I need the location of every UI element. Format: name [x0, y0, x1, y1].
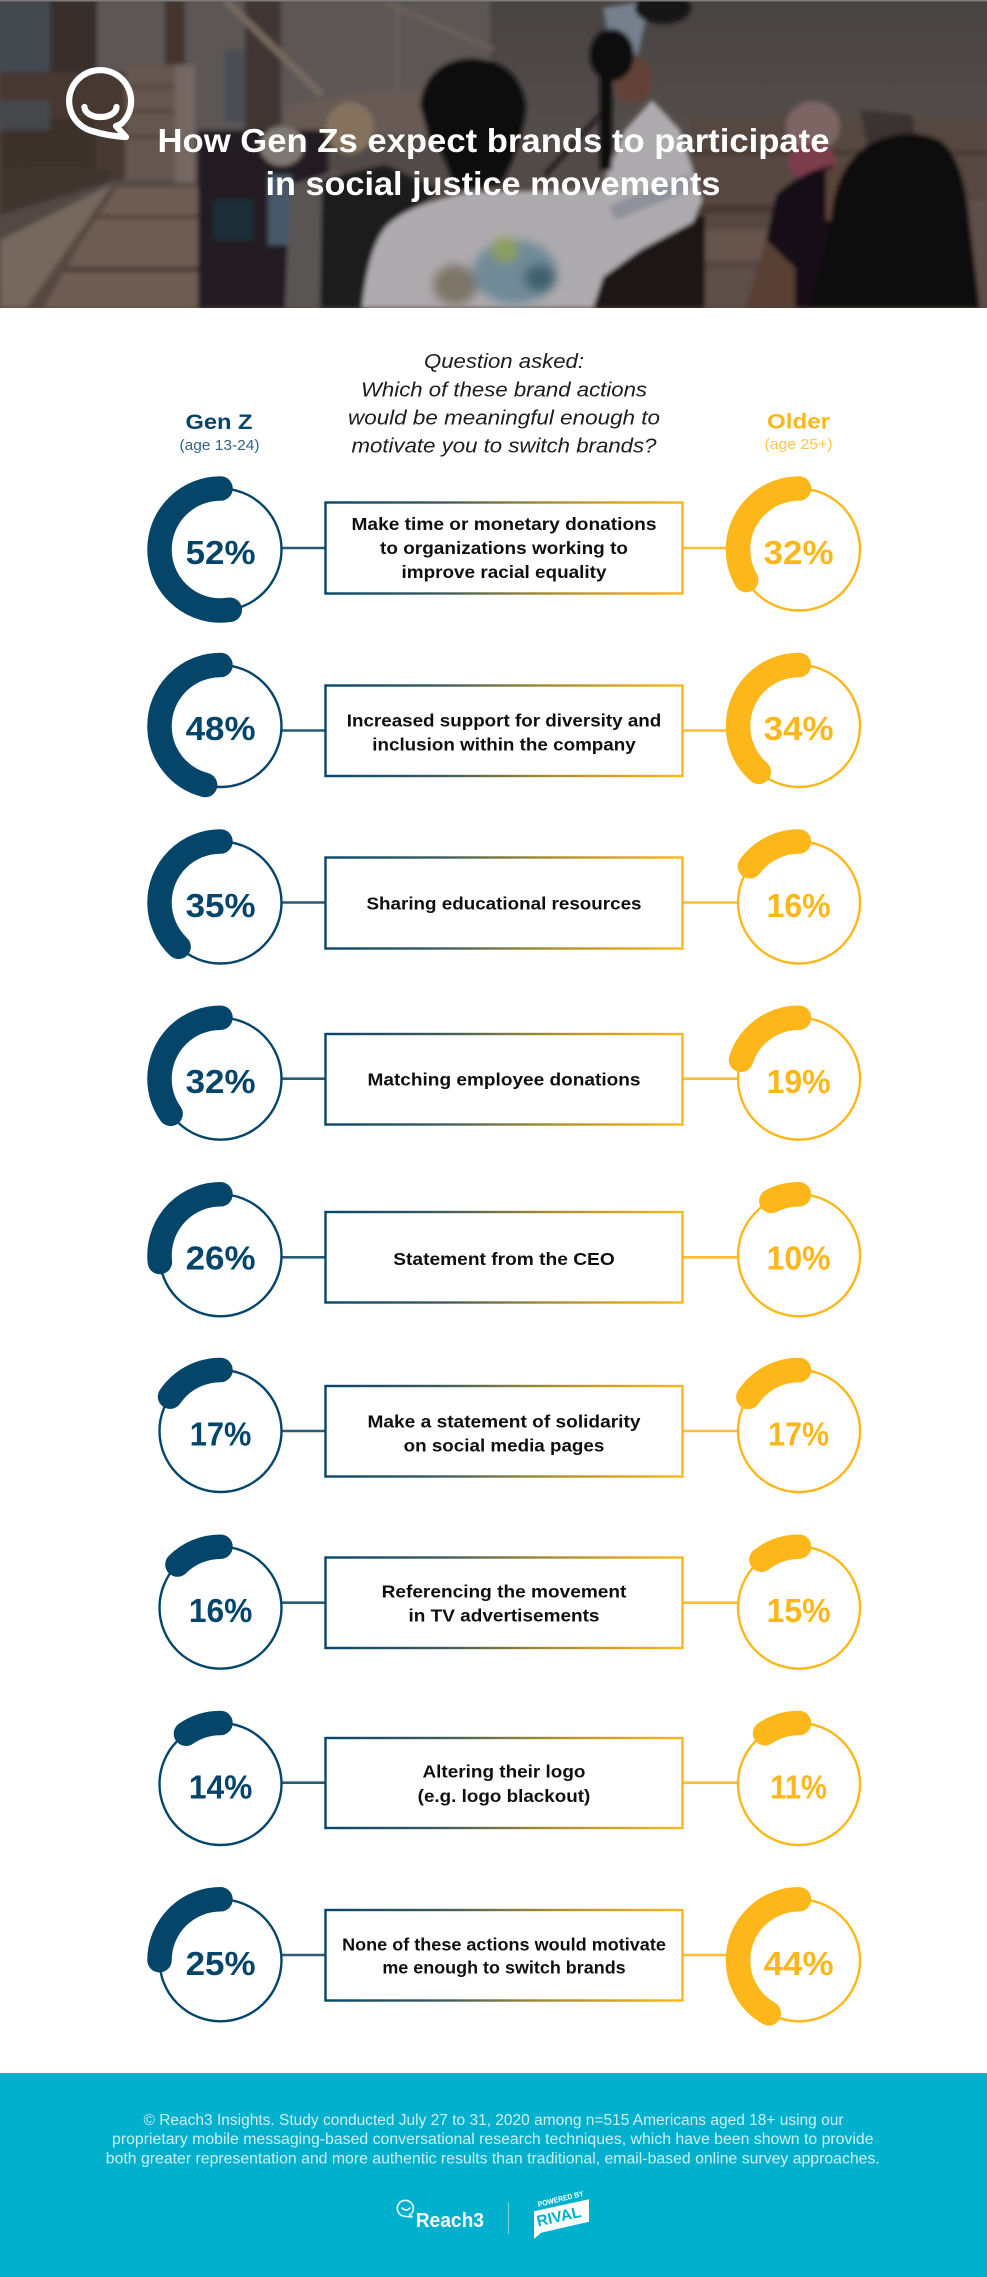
footer source note: © Reach3 Insights. Study conducted July 27 to 31, 2020 among n=515 Americans aged 18+ using our — [144, 2112, 844, 2129]
row 7: TV advertisements: 16% — [189, 1592, 252, 1629]
Powered by Rival logo: RIVAL — [535, 2204, 583, 2230]
row 4: matching employee donations: 32% — [186, 1063, 256, 1100]
row 8: altering logo: Altering their logo — [422, 1762, 586, 1782]
row 9: none of these: None of these actions would motivate — [342, 1935, 666, 1955]
logo: speech bubble with smile — [69, 70, 131, 137]
hand and megaphone — [613, 56, 653, 104]
row 5: statement from the CEO — [160, 1194, 860, 1316]
row 6: solidarity on social media — [160, 1370, 860, 1492]
Powered by Rival logo — [534, 2189, 589, 2239]
row 8: altering logo: 14% — [189, 1768, 252, 1805]
row 4: matching employee donations — [160, 1018, 860, 1140]
column heading: Gen Z — [180, 411, 260, 454]
question asked: would be meaningful enough to — [348, 408, 660, 430]
column heading: Older: (age 25+) — [764, 436, 832, 453]
hair — [420, 58, 526, 190]
logo divider — [508, 2202, 510, 2234]
Powered by Rival logo: POWERED BY — [537, 2189, 585, 2209]
hero photo: protester with megaphone on a bridge — [0, 0, 987, 308]
question asked: Question asked: — [424, 351, 584, 373]
row 1: donations: 32% — [764, 534, 834, 571]
pink-haired person — [786, 101, 840, 151]
row 2: diversity and inclusion: inclusion within the company — [372, 734, 636, 754]
footer band — [0, 2073, 987, 2277]
row 7: TV advertisements: in TV advertisements — [408, 1606, 600, 1626]
row 6: solidarity on social media: 17% — [190, 1416, 251, 1452]
row 9: none of these: 44% — [764, 1945, 834, 1982]
column heading: Older: Older — [767, 410, 830, 434]
row 3: educational resources: 35% — [186, 887, 256, 924]
row 3: educational resources: 16% — [767, 887, 831, 924]
question asked: Which of these brand actions — [361, 380, 647, 402]
crowd — [198, 130, 328, 308]
woman with long hair — [826, 165, 845, 225]
shirt graphic — [433, 237, 557, 305]
row 6: solidarity on social media: Make a statement of solidarity — [368, 1411, 641, 1431]
row 5: statement from the CEO: 10% — [767, 1240, 831, 1276]
right background — [690, 118, 987, 308]
row 8: altering logo: 11% — [770, 1768, 827, 1805]
title: How Gen Zs expect brands to participate — [158, 122, 829, 159]
row 7: TV advertisements: 15% — [767, 1592, 831, 1629]
question asked — [348, 351, 660, 458]
column heading: Gen Z: Gen Z — [186, 411, 253, 434]
row 3: educational resources — [160, 842, 860, 964]
row 6: solidarity on social media: 17% — [768, 1416, 829, 1452]
title — [158, 122, 829, 202]
footer source note: proprietary mobile messaging-based conversational research techniques, which have been shown to provide — [112, 2131, 874, 2148]
row 1: donations: improve racial equality — [402, 562, 607, 582]
row 2: diversity and inclusion — [160, 665, 860, 787]
footer source note: both greater representation and more authentic results than traditional, email-based online survey approaches. — [106, 2150, 880, 2167]
question asked: motivate you to switch brands? — [352, 436, 657, 458]
footer source note — [106, 2112, 880, 2167]
row 5: statement from the CEO: 26% — [186, 1240, 256, 1276]
row 3: educational resources: Sharing educational resources — [366, 894, 642, 914]
row 9: none of these: 25% — [186, 1945, 256, 1982]
column heading: Older — [764, 410, 832, 453]
row 8: altering logo — [160, 1723, 860, 1845]
row 4: matching employee donations: Matching employee donations — [368, 1070, 641, 1090]
row 4: matching employee donations: 19% — [767, 1063, 831, 1100]
Reach3 logo: Reach3 — [416, 2210, 484, 2232]
row 6: solidarity on social media: on social media pages — [404, 1435, 605, 1455]
Reach3 logo — [397, 2200, 484, 2232]
row 1: donations: Make time or monetary donations — [352, 514, 657, 534]
row 7: TV advertisements: Referencing the movement — [382, 1581, 627, 1601]
row 2: diversity and inclusion: 48% — [186, 710, 256, 747]
row 5: statement from the CEO: Statement from the CEO — [393, 1249, 615, 1269]
row 7: TV advertisements — [160, 1547, 860, 1669]
row 9: none of these: me enough to switch brands — [382, 1958, 626, 1978]
row 2: diversity and inclusion: 34% — [764, 710, 834, 747]
column heading: Gen Z: (age 13-24) — [180, 437, 260, 454]
row 9: none of these — [160, 1899, 860, 2021]
row 2: diversity and inclusion: Increased support for diversity and — [347, 710, 661, 730]
title: in social justice movements — [266, 165, 720, 202]
row 1: donations — [160, 488, 860, 610]
row 1: donations: to organizations working to — [380, 538, 628, 558]
row 8: altering logo: (e.g. logo blackout) — [418, 1786, 590, 1806]
row 1: donations: 52% — [186, 534, 256, 571]
main person shirt — [362, 100, 702, 308]
